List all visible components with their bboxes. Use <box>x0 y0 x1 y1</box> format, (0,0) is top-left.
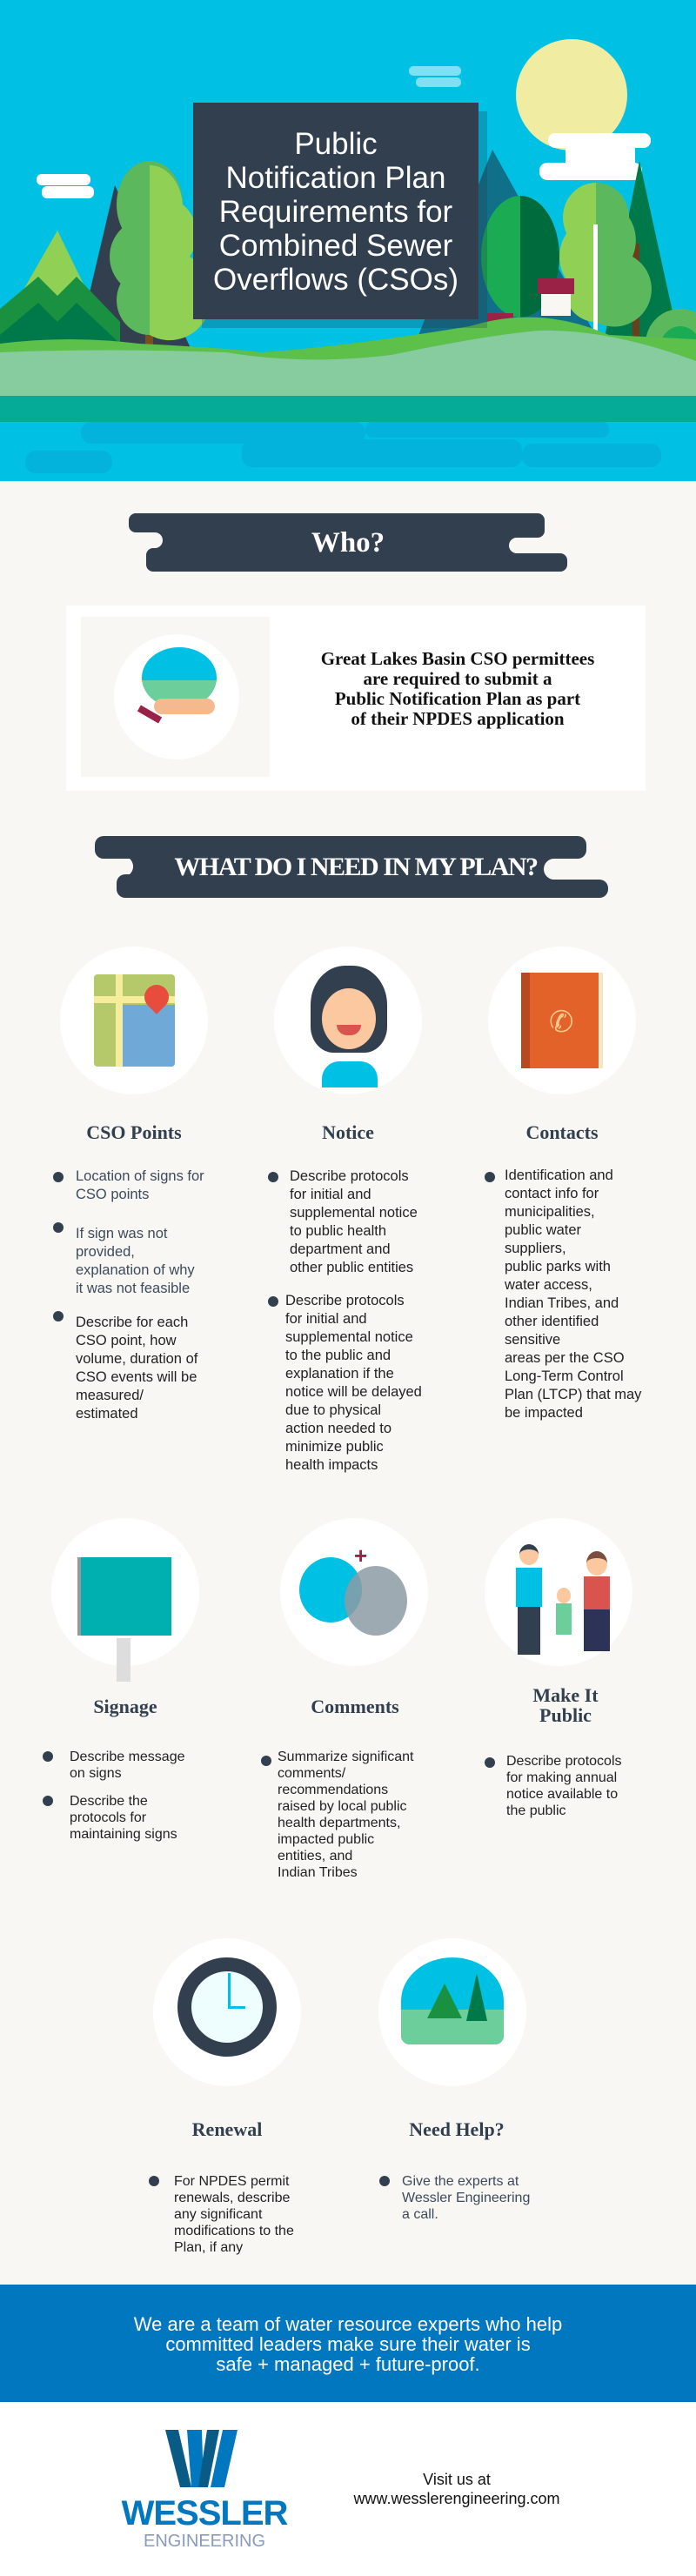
logo: Wessler Engineering: ENGINEERING <box>144 2532 265 2551</box>
section: Contacts: Identification and <box>505 1168 613 1183</box>
text: a call. <box>402 2207 438 2222</box>
icon: sun <box>516 39 627 151</box>
heading: CSO Points <box>86 1121 182 1143</box>
section: Signage: Describe the <box>70 1794 148 1809</box>
section: Contacts: Indian Tribes, and <box>505 1295 619 1311</box>
icon: speech bubbles <box>280 1518 428 1666</box>
logo: Wessler Engineering <box>122 2430 287 2551</box>
section: Contacts: Long-Term Control <box>505 1368 624 1384</box>
icon: address book: ✆ <box>549 1006 574 1039</box>
section: CSO Points <box>53 947 208 1422</box>
section: Notice: department and <box>290 1241 391 1257</box>
icon: clouds <box>37 66 651 198</box>
title box: Combined Sewer <box>219 229 452 263</box>
section: Comments: comments/ <box>278 1766 345 1781</box>
section: Make It Public: for making annual <box>506 1770 617 1785</box>
icon: family <box>485 1518 632 1666</box>
section: Renewal <box>149 1938 301 2255</box>
banner: mission statement: We are a team of water resource experts who help <box>134 2313 562 2335</box>
icon: woman <box>274 947 422 1094</box>
text: health impacts <box>285 1457 378 1473</box>
title box: Overflows (CSOs) <box>213 263 458 297</box>
section: Signage: Describe message <box>70 1750 184 1764</box>
ground and water <box>0 318 696 473</box>
bullets <box>379 2176 390 2186</box>
heading: what do I need <box>95 836 608 898</box>
section: Signage: maintaining signs <box>70 1827 177 1842</box>
heading: Comments <box>311 1696 399 1717</box>
section: Notice: Describe protocols <box>285 1293 405 1308</box>
text: website: www.wesslerengineering.com <box>353 2490 560 2507</box>
section: Comments: raised by local public <box>278 1799 407 1814</box>
section: Notice: to public health <box>290 1223 386 1239</box>
section: Contacts: other identified <box>505 1314 599 1329</box>
section: Comments: entities, and <box>278 1849 352 1863</box>
bullets <box>149 2176 159 2186</box>
icon: map pin <box>60 947 208 1094</box>
section: Need Help? <box>378 1938 530 2222</box>
text: minimize public <box>285 1439 384 1455</box>
text: website <box>353 2471 560 2507</box>
bullets <box>43 1751 53 1762</box>
bullets <box>485 1172 495 1182</box>
banner: mission statement: safe + managed + future-proof. <box>216 2353 480 2375</box>
section: Notice: action needed to <box>285 1421 392 1436</box>
text: who statement: Great Lakes Basin CSO permittees <box>321 648 594 669</box>
section: Contacts: Plan (LTCP) that may <box>505 1387 641 1402</box>
section: CSO Points: explanation of why <box>76 1262 195 1278</box>
bullets <box>261 1756 271 1766</box>
title box: Requirements for <box>219 195 452 229</box>
section: Renewal: modifications to the <box>174 2224 294 2238</box>
section: Make It Public <box>485 1518 632 1818</box>
section: CSO Points: it was not feasible <box>76 1281 190 1296</box>
section: CSO Points: CSO points <box>76 1187 149 1202</box>
section: Signage: protocols for <box>70 1810 146 1825</box>
section: Comments: health departments, <box>278 1816 400 1830</box>
icon: speech bubbles: + <box>354 1542 367 1569</box>
text: who statement: are required to submit a <box>363 668 552 689</box>
bullets <box>53 1172 64 1182</box>
section: Comments: recommendations <box>278 1783 388 1797</box>
section: Notice: for initial and <box>290 1187 371 1202</box>
section: Comments: Indian Tribes <box>278 1865 358 1880</box>
heading: Who? <box>129 513 567 572</box>
icon: address book <box>488 947 636 1094</box>
icon: clock <box>153 1938 301 2086</box>
heading: Need Help? <box>409 2118 505 2140</box>
section: Notice: other public entities <box>290 1260 413 1275</box>
heading: Signage <box>93 1696 157 1717</box>
section: Notice: for initial and <box>285 1311 367 1327</box>
section: Make It Public: Describe protocols <box>506 1754 621 1769</box>
text: CSO events will be <box>76 1369 197 1385</box>
text: who statement: of their NPDES application <box>351 708 565 729</box>
section: Renewal: Plan, if any <box>174 2240 243 2255</box>
section: Contacts: sensitive <box>505 1332 560 1348</box>
heading: Public <box>539 1704 592 1726</box>
section: Contacts <box>485 947 642 1421</box>
footer <box>0 2402 696 2576</box>
heading: Make It <box>532 1684 599 1706</box>
section: Renewal: renewals, describe <box>174 2191 290 2205</box>
text: CSO point, how <box>76 1333 177 1348</box>
heading: Renewal <box>192 2118 262 2140</box>
trees <box>110 161 696 378</box>
text: website: Visit us at <box>423 2471 491 2488</box>
section: Signage <box>43 1518 199 1842</box>
section: Contacts: public water <box>505 1222 581 1238</box>
title box <box>193 103 478 319</box>
section: Comments: impacted public <box>278 1832 374 1847</box>
heading: Who?: Who? <box>311 527 385 559</box>
section: Notice: explanation if the <box>285 1366 394 1382</box>
section: CSO Points: Describe for each <box>76 1315 188 1330</box>
text: estimated <box>76 1406 138 1422</box>
text: who statement <box>321 648 594 729</box>
section: CSO Points: provided, <box>76 1244 135 1260</box>
panel: who box <box>66 606 646 791</box>
title box: Public <box>294 127 378 161</box>
banner: mission statement: committed leaders make sure their water is <box>165 2333 531 2355</box>
icon: nature scene <box>378 1938 526 2086</box>
bullets <box>485 1757 495 1768</box>
text: the public <box>506 1803 566 1818</box>
section: Notice: supplemental notice <box>290 1205 418 1221</box>
section: Comments: Summarize significant <box>278 1750 414 1764</box>
heading: Notice <box>322 1121 374 1143</box>
section: Notice: supplemental notice <box>285 1329 413 1345</box>
section: Comments <box>261 1518 428 1880</box>
icon: billboard <box>51 1518 199 1666</box>
logo: Wessler Engineering: WESSLER <box>122 2494 287 2533</box>
section: Contacts: public parks with <box>505 1259 611 1275</box>
text: who statement: Public Notification Plan as part <box>335 688 580 709</box>
text: volume, duration of <box>76 1351 197 1367</box>
section: Contacts: municipalities, <box>505 1204 595 1220</box>
section: Renewal: For NPDES permit <box>174 2174 289 2189</box>
text: measured/ <box>76 1388 144 1403</box>
heading: Contacts <box>525 1121 599 1143</box>
section: CSO Points: If sign was not <box>76 1226 167 1241</box>
text: be impacted <box>505 1405 583 1421</box>
section: Contacts: areas per the CSO <box>505 1350 625 1366</box>
hero scene <box>0 0 696 481</box>
section: Need Help?: Give the experts at <box>402 2174 519 2189</box>
title box: Notification Plan <box>226 161 445 195</box>
heading <box>532 1684 599 1726</box>
section: Notice: notice will be delayed <box>285 1384 422 1400</box>
banner: mission statement <box>0 2285 696 2402</box>
section: Need Help?: Wessler Engineering <box>402 2191 530 2205</box>
section: Notice: due to physical <box>285 1402 381 1418</box>
section: Contacts: water access, <box>505 1277 592 1293</box>
section: Contacts: contact info for <box>505 1186 599 1201</box>
section: Notice: Describe protocols <box>290 1168 409 1184</box>
section: Notice <box>268 947 422 1473</box>
section: Make It Public: notice available to <box>506 1787 618 1802</box>
bullets <box>268 1172 278 1182</box>
icon: hand holding earth <box>81 617 270 777</box>
section: CSO Points: Location of signs for <box>76 1168 204 1184</box>
mountains <box>0 150 683 359</box>
section: Signage: on signs <box>70 1766 122 1781</box>
heading: what do I need: WHAT DO I NEED IN MY PLAN? <box>174 853 538 881</box>
section: Contacts: suppliers, <box>505 1241 566 1256</box>
section: Renewal: any significant <box>174 2207 262 2222</box>
section: Notice: to the public and <box>285 1348 391 1363</box>
